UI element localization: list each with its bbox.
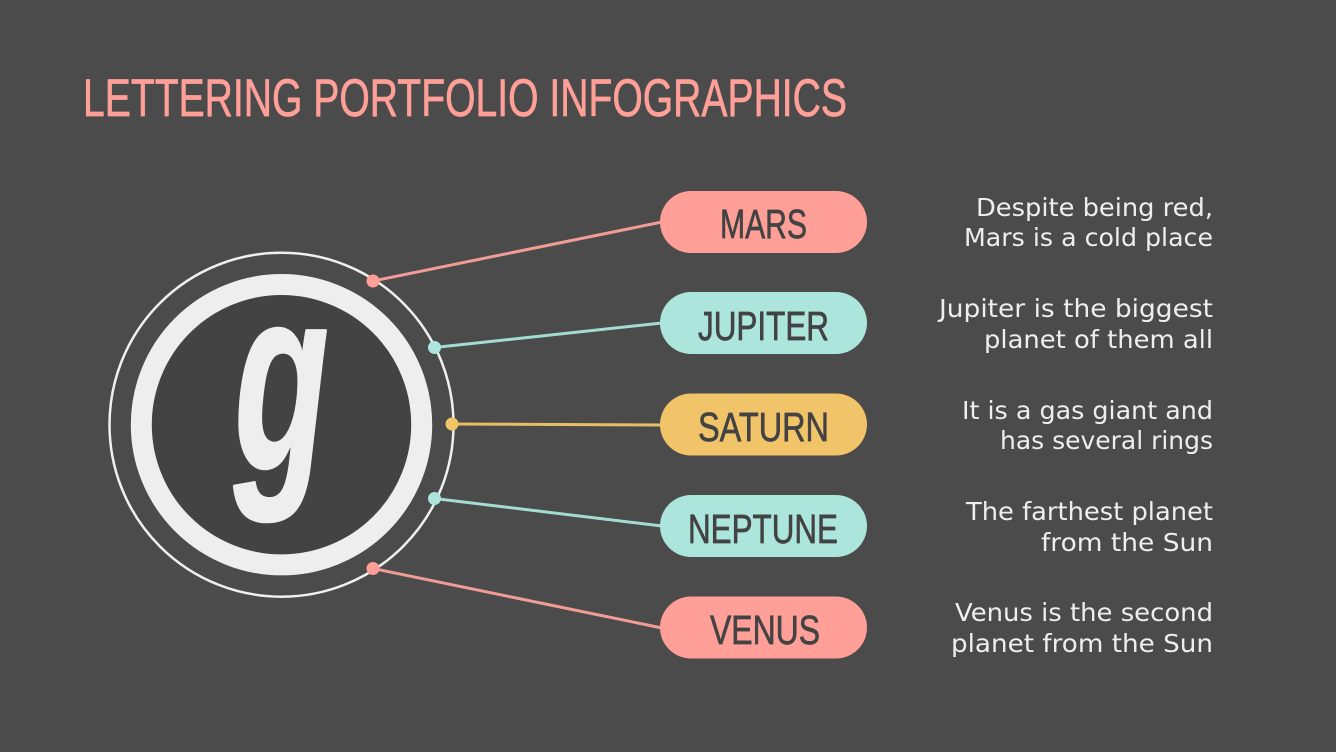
description: Mars	[964, 193, 1213, 252]
description: Saturn	[962, 396, 1213, 455]
pill: Jupiter: JUPITER	[698, 303, 829, 349]
pill: Neptune	[660, 495, 867, 557]
pill: Saturn	[660, 394, 867, 456]
description: Jupiter: planet of them all	[984, 325, 1213, 354]
connector: Neptune	[428, 492, 662, 526]
connector: Jupiter	[428, 323, 662, 354]
outer thin ring	[110, 253, 454, 597]
description: Neptune	[965, 497, 1213, 557]
pill: Mars: MARS	[720, 201, 807, 247]
connector: Saturn	[446, 418, 662, 430]
description: Neptune: The farthest planet	[965, 497, 1213, 526]
letter g: g	[233, 233, 329, 524]
connector: Mars	[366, 222, 662, 288]
description: Venus	[951, 598, 1213, 658]
pill: Jupiter	[660, 292, 867, 354]
pill: Venus: VENUS	[710, 607, 820, 653]
description: Venus: planet from the Sun	[951, 629, 1213, 658]
title: LETTERING PORTFOLIO INFOGRAPHICS	[83, 69, 847, 128]
connector: Venus	[366, 562, 662, 628]
pill: Venus	[660, 596, 867, 658]
description: Saturn: has several rings	[1000, 426, 1213, 455]
description: Jupiter: Jupiter is the biggest	[937, 294, 1213, 323]
description: Jupiter	[937, 294, 1213, 354]
description: Mars: Despite being red,	[976, 193, 1213, 222]
description: Venus: Venus is the second	[955, 598, 1213, 627]
pill: Neptune: NEPTUNE	[688, 506, 838, 552]
description: Saturn: It is a gas giant and	[962, 396, 1213, 425]
pill: Saturn: SATURN	[698, 404, 829, 450]
pill: Mars	[660, 191, 867, 253]
description: Mars: Mars is a cold place	[964, 223, 1213, 252]
circular logo badge	[110, 233, 454, 597]
description: Neptune: from the Sun	[1041, 528, 1213, 557]
thick inner ring	[141, 284, 422, 565]
